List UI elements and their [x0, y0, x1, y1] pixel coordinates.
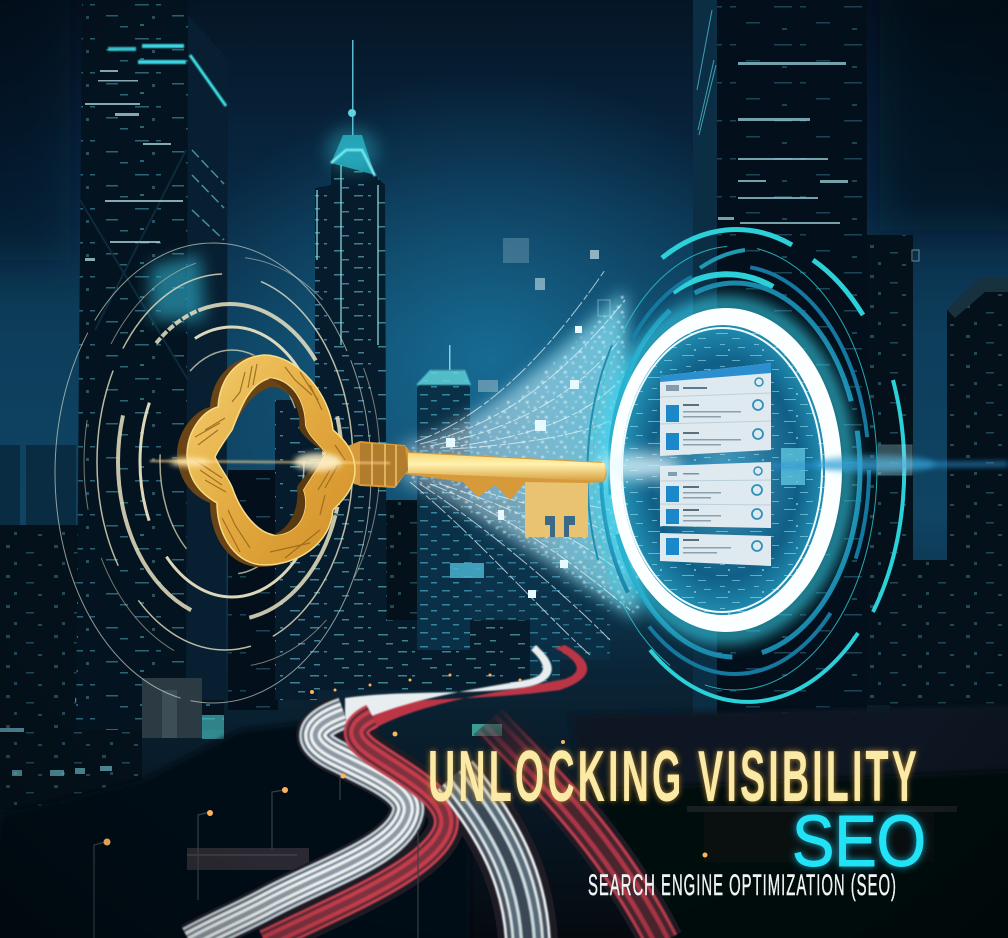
ground: city base and trees — [0, 705, 1008, 938]
left tech rings around key bow — [55, 243, 380, 703]
icon: golden circuit key — [150, 355, 607, 567]
right tall tower — [693, 0, 867, 715]
lower white ribbon — [190, 713, 408, 938]
white ring crescent — [610, 308, 842, 632]
outer segmented rings — [587, 229, 904, 702]
right of spire short tower — [416, 345, 471, 650]
upper white ribbon — [345, 645, 552, 728]
key bow inner depth — [268, 378, 325, 535]
portal glow — [606, 305, 846, 635]
mid background buildings — [228, 400, 610, 710]
street lamps — [94, 674, 708, 938]
circuit traces — [195, 364, 345, 558]
right white ribbon — [455, 775, 528, 938]
centre tall spire tower — [315, 40, 387, 690]
low white block buildings — [142, 678, 224, 739]
key bow depth — [177, 355, 355, 567]
left tower — [76, 0, 228, 730]
highways: light trails — [94, 645, 708, 938]
portal: glowing search results ring — [587, 229, 1008, 702]
search panel: top results — [660, 363, 771, 456]
right red ribbon — [490, 720, 662, 938]
glow accents — [781, 448, 805, 485]
portal interior — [620, 320, 828, 620]
data stream from key to portal — [400, 238, 919, 655]
key blade and shaft — [345, 441, 607, 537]
lower red ribbon — [265, 716, 446, 938]
key bow face — [187, 355, 355, 565]
search panel: bottom result — [660, 533, 771, 566]
upper red ribbon — [372, 645, 587, 730]
far right towers — [867, 235, 1008, 760]
lens flares — [150, 453, 390, 471]
distant low buildings left — [0, 445, 142, 810]
overpass bridge — [187, 848, 309, 870]
heading: SEO: SEO — [792, 802, 926, 882]
title block — [428, 737, 926, 902]
search panel: middle results — [660, 462, 771, 528]
roadbed — [190, 713, 662, 938]
